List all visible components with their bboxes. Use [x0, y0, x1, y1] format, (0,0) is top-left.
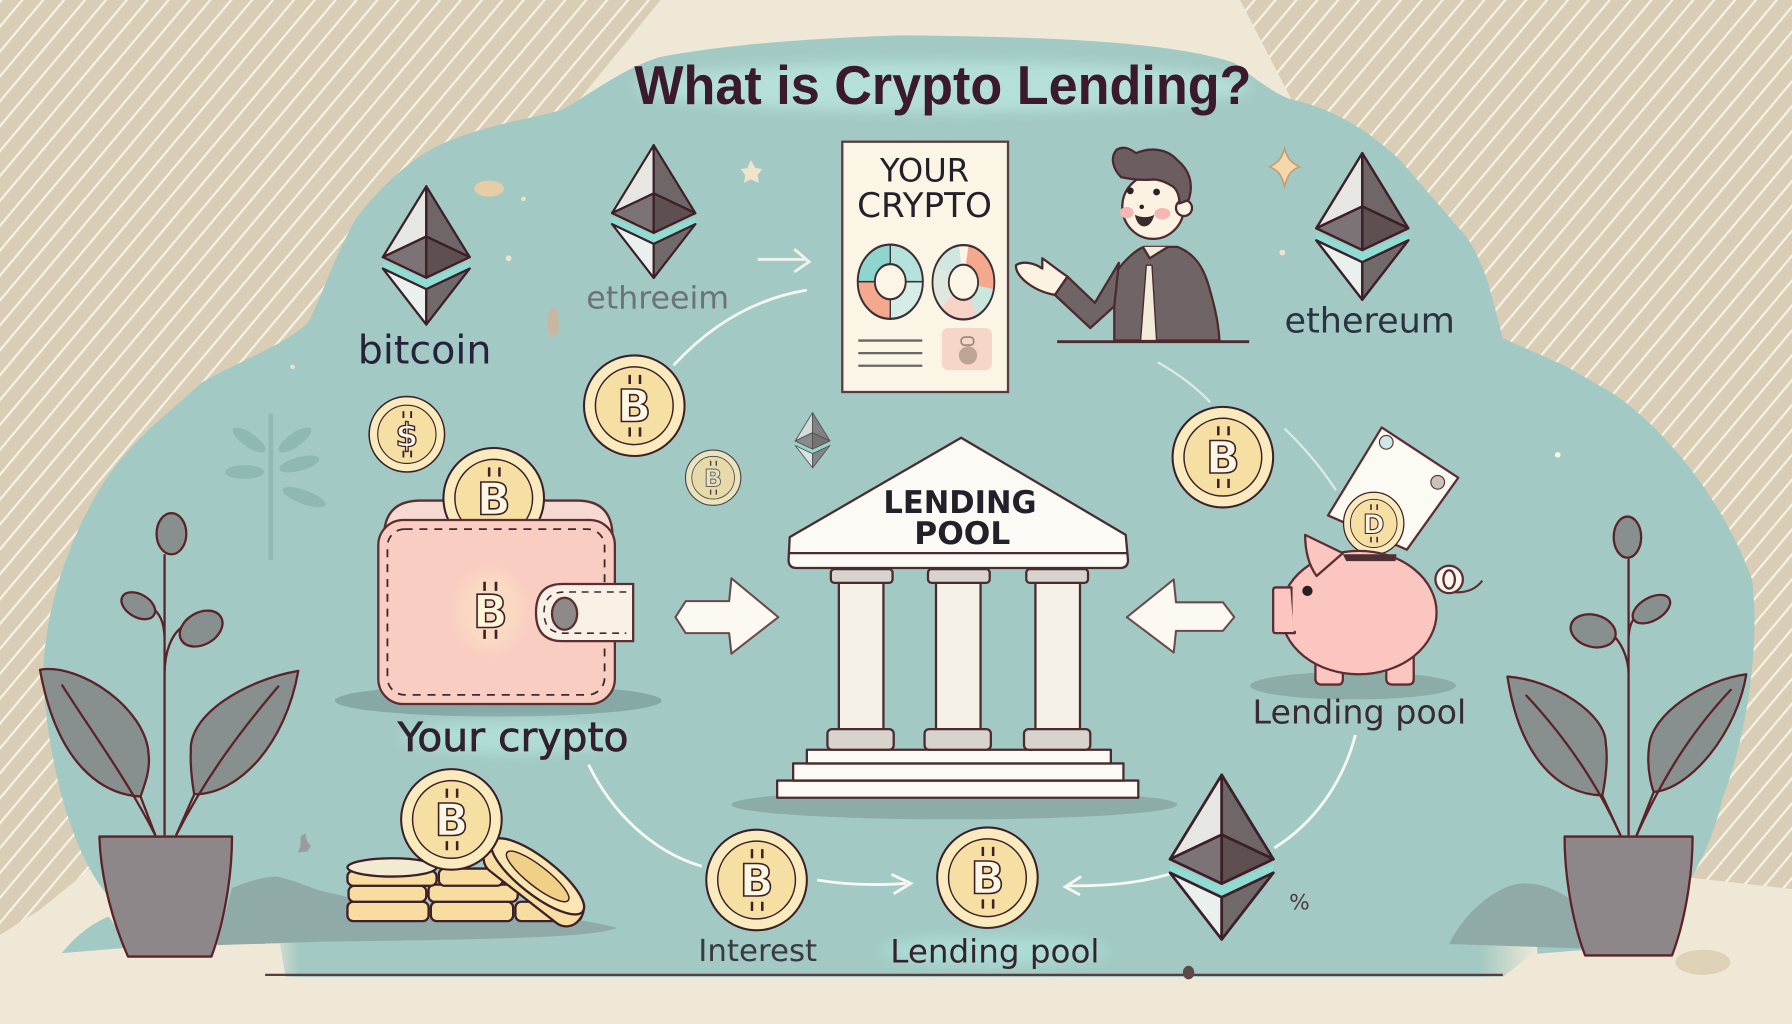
left bud [157, 513, 186, 554]
donut chart: right [932, 245, 994, 319]
wallet shadow [335, 685, 662, 717]
coin: interest: B [740, 855, 774, 907]
lending pool temple [731, 438, 1177, 819]
left plant [40, 513, 298, 957]
percent mark: % [1289, 891, 1310, 916]
tie [1141, 265, 1157, 341]
hair [1113, 148, 1191, 203]
donut chart: left [858, 245, 923, 319]
middle column [925, 569, 991, 750]
ethereum icon: right [1316, 153, 1408, 300]
piggy legs [1315, 651, 1414, 685]
wallet clasp [536, 584, 633, 641]
face [1122, 175, 1184, 239]
label: lending pool right: Lending pool [1253, 692, 1466, 731]
ground line [265, 966, 1503, 979]
wallet bitcoin symbol [458, 571, 522, 649]
coin: right: B [1206, 432, 1240, 484]
piggy eye [1302, 586, 1313, 596]
coin pile [347, 769, 596, 933]
person presenting [1016, 148, 1249, 342]
right plant [1449, 517, 1746, 975]
pile top coin: B [434, 794, 468, 846]
collar [1143, 247, 1168, 258]
label: interest: Interest [698, 934, 817, 969]
arm and sleeve [1055, 263, 1119, 328]
right stem [1602, 559, 1654, 835]
document text lines [858, 341, 922, 366]
right column [1024, 569, 1090, 750]
ear [1176, 200, 1192, 216]
right bud [1614, 517, 1641, 558]
flow curve: person to piggy [1158, 362, 1336, 490]
right big leaves [1507, 677, 1607, 795]
ground shadow under left pot and coin pile [217, 877, 617, 945]
left pot [99, 837, 232, 957]
ethereum icon: small faded [795, 413, 830, 468]
document heading line 1: YOUR [879, 152, 969, 190]
coin: top left [584, 355, 685, 456]
wallet back layers [384, 501, 613, 686]
wallet bitcoin symbol: B [473, 585, 508, 638]
body [1114, 247, 1219, 341]
ethereum icon: middle [612, 145, 695, 278]
temple label line 2: POOL [914, 516, 1010, 552]
left column [827, 569, 894, 750]
ethereum icon: bottom [1170, 775, 1273, 939]
striped panel: right [1240, 0, 1792, 889]
stacked discs [347, 858, 582, 921]
coin: entering wallet: B [477, 473, 511, 525]
piggy body [1281, 551, 1437, 674]
small hill left of pot [62, 917, 131, 953]
coin: lending pool: B [970, 853, 1004, 905]
flow arrow: ethereum to lending pool [1065, 874, 1169, 895]
label: ethereum: ethereum [1285, 302, 1455, 342]
piggy bank [1250, 427, 1482, 699]
arrow: wallet to pool [675, 578, 778, 654]
left stem [141, 554, 194, 835]
title: What is Crypto Lending? [634, 54, 1251, 116]
panel: your crypto document [842, 142, 1008, 392]
coin: entering wallet [443, 448, 544, 549]
coin: small left [369, 397, 445, 472]
left big leaf [40, 669, 149, 797]
document heading line 2: CRYPTO [857, 186, 992, 225]
piggy snout [1273, 587, 1295, 633]
flow curve: lending pool to ethereum [1274, 735, 1355, 848]
clasp stitching [544, 592, 626, 633]
striped panel: left [0, 0, 661, 935]
piggy ear [1305, 535, 1343, 576]
right small leaves [1567, 609, 1619, 652]
temple label line 1: LENDING [883, 485, 1037, 521]
flow arrow: interest to lending pool [817, 874, 911, 894]
flow arrow: coin to document [674, 290, 806, 365]
coin: right [1173, 407, 1273, 507]
clasp button [552, 598, 577, 630]
ethereum icon: left [383, 186, 470, 325]
hill behind right pot [1449, 883, 1589, 949]
facial features [1120, 187, 1170, 226]
temple roof [789, 438, 1128, 568]
flow arrow: small to document [758, 249, 809, 272]
piggy coin: D [1363, 509, 1385, 540]
coin slot [1343, 554, 1397, 561]
piggy tail [1435, 566, 1482, 593]
temple shadow [731, 790, 1177, 819]
piggy shadow [1250, 672, 1456, 699]
hand [1016, 258, 1067, 295]
desk line [1057, 340, 1249, 343]
left small leaves [117, 587, 160, 625]
wallet stitching [387, 529, 605, 695]
coin: small left: $ [396, 416, 418, 454]
flow curve: your crypto to interest [589, 765, 702, 866]
banknote [1328, 427, 1458, 550]
label: bitcoin: bitcoin [358, 328, 491, 373]
label: blurred ethereum: ethreeim [586, 281, 729, 317]
label: your crypto: Your crypto [397, 715, 629, 761]
coin: lending pool [937, 827, 1038, 928]
wallet [335, 448, 662, 717]
decorative specks [290, 160, 1561, 853]
temple steps [777, 750, 1138, 798]
wallet front [378, 520, 615, 704]
coin: interest [706, 830, 807, 930]
pink badge [942, 328, 992, 370]
decorative sparkle: orange [1270, 149, 1299, 186]
label: lending pool bottom: Lending pool [890, 932, 1099, 970]
pile top coin [401, 769, 502, 870]
tilted disc [477, 827, 596, 933]
sand mound [1675, 950, 1730, 975]
right pot [1565, 837, 1693, 955]
coin: top left: B [617, 381, 651, 433]
piggy coin [1344, 492, 1404, 555]
coin: small faded: B [704, 465, 722, 493]
faint background plant [225, 414, 328, 560]
right big leaf of left plant [191, 671, 298, 794]
coin: small faded [685, 450, 741, 505]
arrow: piggy to pool [1127, 579, 1234, 653]
